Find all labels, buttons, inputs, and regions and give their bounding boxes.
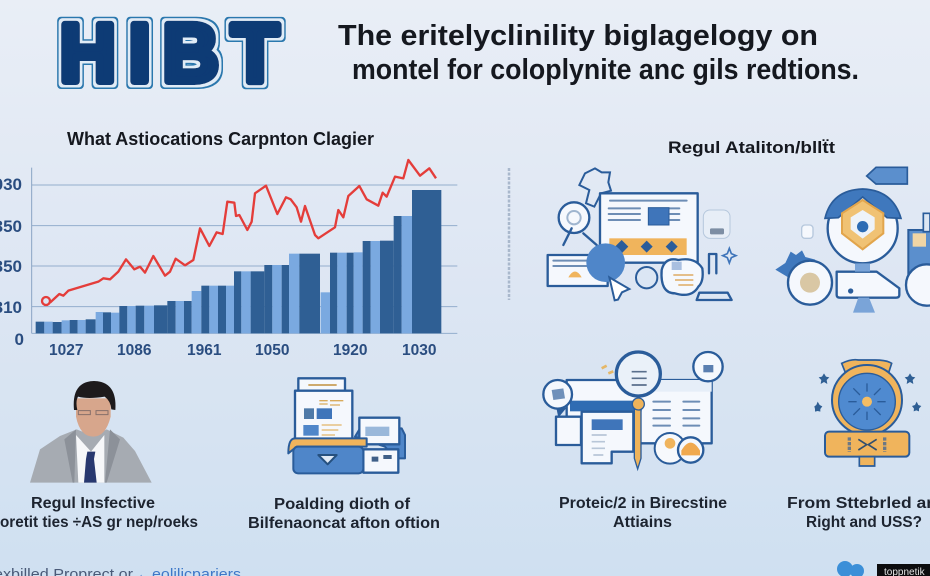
plot xyxy=(32,160,457,333)
caption: Poalding xyxy=(248,496,440,532)
caption: Regul Insfective: oretit ties ÷AS gr nep/roeks xyxy=(0,514,198,531)
logo: HIBT: HIBT xyxy=(60,7,279,98)
x axis labels: 1086 xyxy=(117,342,152,359)
x axis labels: 1050 xyxy=(255,342,289,359)
right heading: Regul Ataliton/bllẗt xyxy=(668,138,835,157)
y axis labels xyxy=(0,175,24,349)
caption: Proteic: Proteic/2 in Birecstine xyxy=(559,495,727,512)
y axis labels: 0 xyxy=(15,330,24,349)
chart: bars and line xyxy=(0,160,457,359)
x axis labels: 1961 xyxy=(187,342,222,359)
caption: From xyxy=(787,495,930,531)
title xyxy=(338,20,859,86)
caption: From: From Sttebrled an xyxy=(787,495,930,512)
footer text xyxy=(0,566,241,576)
icon: magnifier over documents xyxy=(543,352,723,469)
caption: Proteic: Attiains xyxy=(613,514,672,531)
icon: document tray xyxy=(288,378,405,473)
icon: blue cloud logo xyxy=(837,561,864,576)
caption: From: Right and USS? xyxy=(806,514,922,531)
caption: Poalding: Bilfenaoncat afton oftion xyxy=(248,515,440,532)
x axis labels: 1027 xyxy=(49,342,83,359)
chart heading: What Astiocations Carpnton Clagier xyxy=(67,129,374,149)
x axis labels xyxy=(49,342,436,359)
caption: Regul Insfective xyxy=(0,495,198,531)
icon: gear globe machine xyxy=(775,167,930,313)
title: The eritelyclinility biglagelogy on xyxy=(338,20,818,52)
badge: black label xyxy=(877,564,930,576)
icon: clock with amber plate xyxy=(814,360,921,466)
red line xyxy=(42,160,436,305)
x axis labels: 1030 xyxy=(402,342,436,359)
divider xyxy=(508,168,510,300)
photo: man in grey suit xyxy=(30,381,152,483)
title: montel for coloplynite anc gils redtions. xyxy=(352,54,859,86)
caption: Proteic xyxy=(559,495,727,531)
bars xyxy=(36,190,441,333)
caption: Poalding: Poalding dioth of xyxy=(274,496,411,513)
caption: Regul Insfective: Regul Insfective xyxy=(31,495,155,512)
icon: document dashboard with magnifier and cursor xyxy=(548,168,736,300)
x axis labels: 1920 xyxy=(333,342,367,359)
